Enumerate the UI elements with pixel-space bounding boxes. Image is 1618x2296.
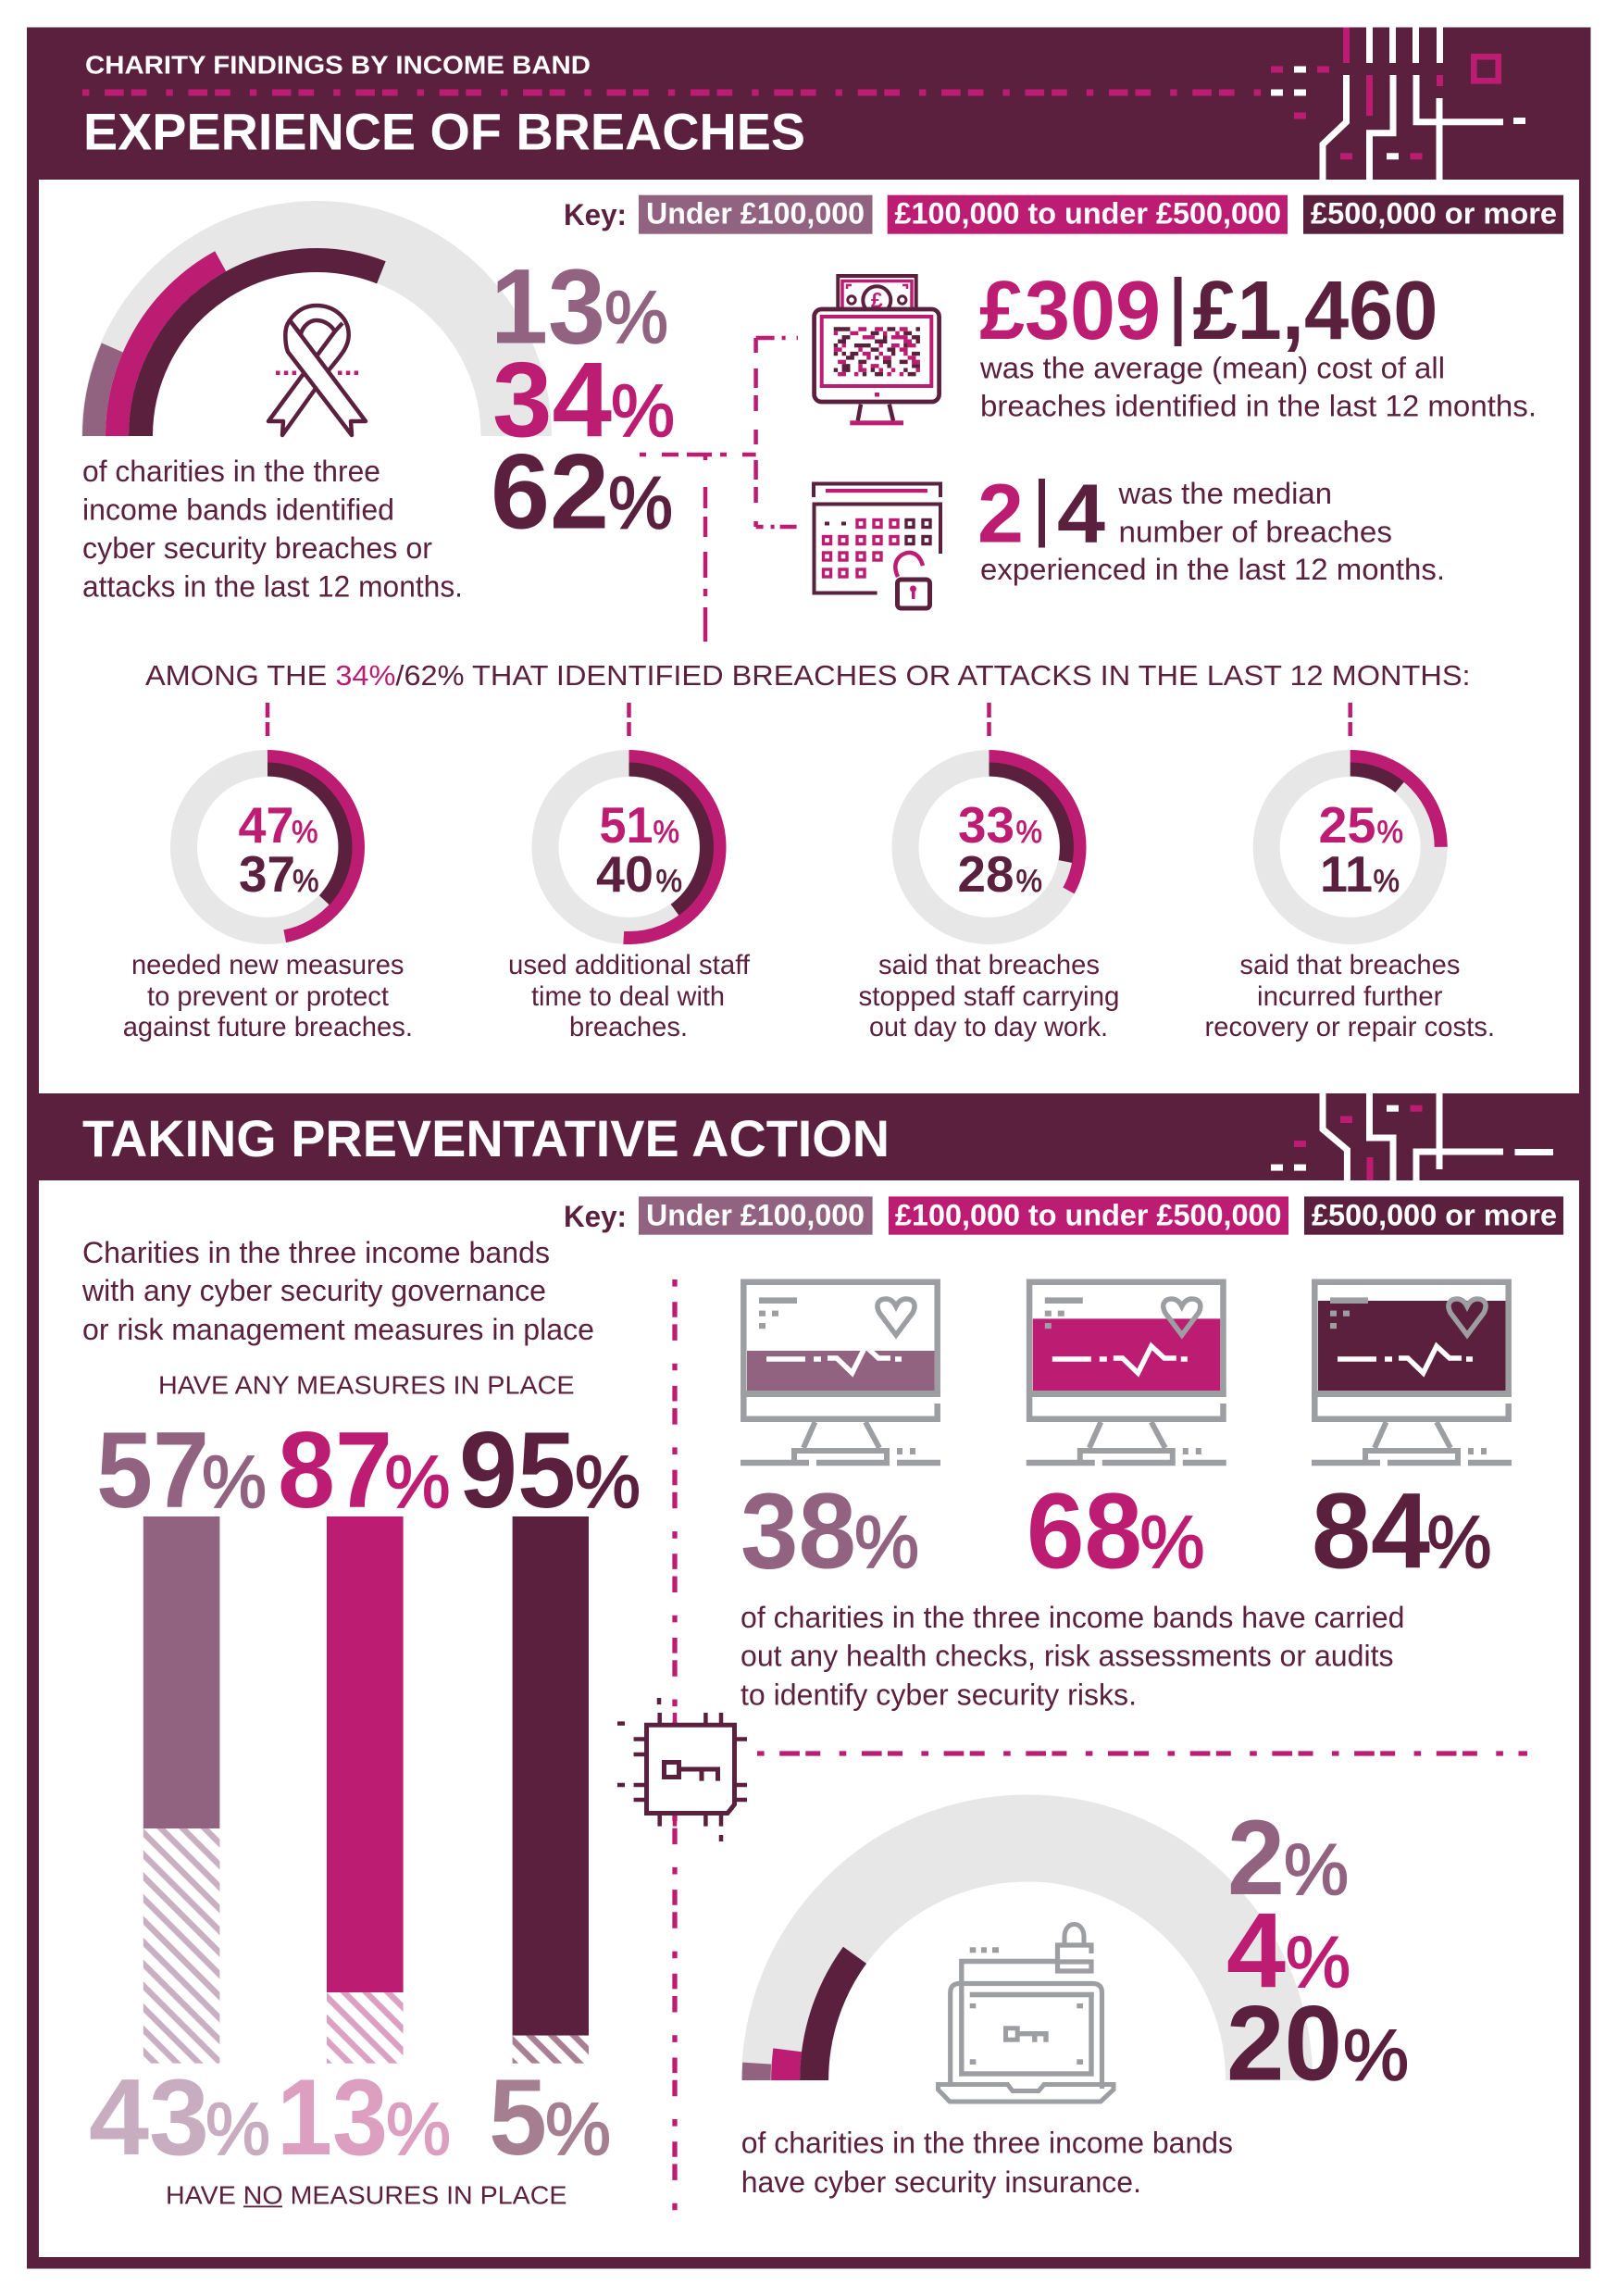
- stat: average cost: [979, 265, 1537, 422]
- stat: 68 percent: 68: [1027, 1470, 1142, 1591]
- icon: monitor 68 percent: [1027, 1282, 1226, 1463]
- bar: 100k to 500k: 13: [277, 2056, 388, 2177]
- caption: recovery or repair costs.: [1205, 1012, 1495, 1042]
- donut: additional staff time: [508, 756, 751, 1042]
- text: identified breaches: attacks in the last 12 months.: [82, 570, 463, 604]
- stat: 20 percent: 20: [1226, 1985, 1342, 2103]
- text: governance intro: with any cyber security governance: [81, 1274, 546, 1307]
- title: EXPERIENCE OF BREACHES: [83, 102, 805, 161]
- stat: 13 percent: 13: [491, 248, 605, 367]
- stat: 34 percent: 34: [492, 341, 612, 459]
- donut: repair costs: %: [1377, 815, 1403, 850]
- icon: ransom monitor: [815, 276, 940, 425]
- header: experience of breaches: [82, 50, 1263, 161]
- icon: laptop with padlock: [939, 1924, 1114, 2102]
- caption: [508, 950, 751, 1042]
- text: health checks: to identify cyber security risks.: [741, 1678, 1137, 1711]
- stat: 68 percent: %: [1140, 1501, 1205, 1583]
- donut: stopped staff working: %: [1016, 864, 1042, 899]
- stat: 68 percent: [1027, 1470, 1205, 1591]
- stat: 62 percent: [491, 433, 673, 552]
- bar: 500k or more: 5: [489, 2056, 547, 2177]
- donut: new measures: 47: [239, 796, 294, 854]
- stat: 20 percent: %: [1343, 2015, 1409, 2096]
- text: average cost: was the average (mean) cost of all: [979, 352, 1445, 385]
- text: cyber insurance: of charities in the three income bands: [741, 2127, 1233, 2160]
- donut: new measures: %: [292, 864, 318, 899]
- donut: additional staff time: %: [655, 864, 682, 899]
- text: cyber insurance: have cyber security insurance.: [741, 2165, 1141, 2199]
- stat: 20 percent: [1226, 1985, 1409, 2103]
- bar: 500k or more: %: [545, 2088, 611, 2170]
- bar: 100k to 500k: %: [385, 1441, 450, 1523]
- text: governance intro: [81, 1236, 594, 1346]
- key: income bands lower: Key:: [564, 1200, 627, 1233]
- text: identified breaches: [82, 455, 463, 604]
- semicircle chart: cyber insurance: [756, 1839, 1269, 2080]
- stat: 84 percent: [1312, 1470, 1492, 1591]
- donut: stopped staff working: [859, 756, 1120, 1042]
- label: have no measures: HAVE NO MEASURES IN PLACE: [166, 2181, 566, 2209]
- donut: stopped staff working: 28: [957, 845, 1014, 903]
- bar: under 100k: [89, 1409, 270, 2177]
- stat: 62 percent: 62: [491, 433, 609, 552]
- caption: against future breaches.: [123, 1012, 413, 1042]
- stat: 38 percent: %: [854, 1501, 919, 1583]
- panel: taking preventative action: [39, 1180, 1579, 2257]
- caption: [123, 950, 413, 1042]
- key: income bands top: [564, 195, 1563, 234]
- stat: median breaches: 4: [1057, 468, 1105, 561]
- donut: repair costs: 11: [1320, 845, 1373, 903]
- icon: monitor 84 percent: [1312, 1282, 1512, 1463]
- stat: 38 percent: 38: [741, 1470, 856, 1591]
- icon: chip with key: [617, 1698, 747, 1841]
- stat: median breaches: [977, 468, 1445, 586]
- text: governance intro: Charities in the three income bands: [82, 1236, 550, 1269]
- caption: said that breaches: [878, 950, 1100, 980]
- bar chart: measures in place: [89, 1409, 641, 2177]
- icon: ransom monitor: £: [871, 288, 883, 312]
- donut: new measures: [123, 756, 413, 1042]
- connector lines: [640, 338, 798, 642]
- stat: average cost: £309: [979, 265, 1161, 357]
- donut: additional staff time: 40: [596, 845, 653, 903]
- stat: median breaches: 2: [977, 468, 1024, 561]
- bar: 100k to 500k: [277, 1409, 451, 2177]
- donut: additional staff time: %: [653, 815, 679, 850]
- donut: repair costs: %: [1374, 864, 1400, 899]
- caption: to prevent or protect: [147, 981, 389, 1012]
- text: identified breaches: cyber security breaches or: [82, 531, 432, 565]
- text: identified breaches: of charities in the three: [82, 455, 380, 488]
- caption: [1205, 950, 1495, 1042]
- text: governance intro: or risk management measures in place: [82, 1313, 594, 1346]
- bar: under 100k: 43: [89, 2056, 209, 2177]
- stat: median breaches: experienced in the last 12 months.: [980, 553, 1445, 586]
- key: income bands top: £500,000 or more: [1311, 196, 1557, 230]
- stat: median breaches: number of breaches: [1118, 516, 1392, 549]
- bar: under 100k: 57: [96, 1409, 209, 1530]
- caption: [859, 950, 1120, 1042]
- caption: time to deal with: [531, 981, 725, 1012]
- icon: calendar and padlock: [814, 483, 940, 608]
- semicircle chart: identified breaches: [94, 236, 517, 436]
- bar: under 100k: %: [205, 2088, 270, 2170]
- stat: 4 percent: %: [1286, 1921, 1350, 2003]
- donut: stopped staff working: %: [1016, 815, 1042, 850]
- text: health checks: [741, 1601, 1405, 1711]
- bar: 500k or more: [459, 1409, 641, 2177]
- key: income bands lower: £500,000 or more: [1312, 1199, 1557, 1232]
- caption: stopped staff carrying: [859, 981, 1120, 1012]
- stat: 84 percent: %: [1427, 1501, 1492, 1583]
- donut: new measures: %: [292, 815, 318, 850]
- stat: average cost: breaches identified in the last 12 months.: [980, 389, 1537, 422]
- icon: circuit decoration top: [1271, 28, 1525, 180]
- text: median breaches: was the median: [1117, 477, 1332, 510]
- text: cyber insurance: [741, 2127, 1233, 2199]
- connector ticks: [268, 703, 1350, 736]
- icon: ribbon: [268, 306, 366, 435]
- key: income bands lower: Under £100,000: [646, 1199, 865, 1232]
- stat: 84 percent: 84: [1312, 1470, 1430, 1591]
- heading: taking preventative action: TAKING PREVENTATIVE ACTION: [82, 1109, 890, 1167]
- stat: 2 percent: [1227, 1799, 1349, 1917]
- stat: average cost: £1,460: [1192, 265, 1438, 357]
- caption: needed new measures: [131, 950, 404, 980]
- key: income bands top: Under £100,000: [646, 196, 865, 230]
- bar: under 100k: %: [202, 1441, 267, 1523]
- stat: 34 percent: [492, 341, 675, 459]
- bar: 100k to 500k: %: [386, 2088, 451, 2170]
- stat: 2 percent: 2: [1227, 1799, 1285, 1917]
- donut: repair costs: 25: [1318, 796, 1375, 854]
- donut: repair costs: [1205, 756, 1495, 1042]
- key: income bands top: Key:: [564, 198, 627, 231]
- caption: breaches.: [569, 1012, 688, 1042]
- text: identified breaches: income bands identified: [82, 493, 394, 526]
- stat: 62 percent: %: [608, 461, 673, 544]
- text: health checks: out any health checks, risk assessments or audits: [741, 1639, 1394, 1672]
- caption: out day to day work.: [869, 1012, 1108, 1042]
- key: income bands top: £100,000 to under £500,000: [894, 196, 1281, 230]
- stat: 34 percent: %: [611, 369, 675, 452]
- panel: experience of breaches: [39, 180, 1579, 1093]
- key: income bands lower: £100,000 to under £500,000: [895, 1199, 1281, 1232]
- caption: used additional staff: [508, 950, 751, 980]
- subheading: among those identifying breaches: AMONG THE 34%/62% THAT IDENTIFIED BREACHES OR ATTACKS IN THE LAST 12 MONTHS:: [145, 659, 1471, 692]
- bar: 500k or more: %: [575, 1441, 641, 1523]
- donut: new measures: 37: [239, 845, 295, 903]
- icon: circuit decoration middle: [1271, 1093, 1553, 1180]
- bar: 100k to 500k: 87: [278, 1409, 392, 1530]
- stat: 4 percent: [1226, 1891, 1350, 2010]
- key: income bands lower: [564, 1196, 1563, 1235]
- stat: 38 percent: [741, 1470, 919, 1591]
- stat: 13 percent: [491, 248, 668, 367]
- stat: 13 percent: %: [604, 276, 668, 358]
- caption: incurred further: [1257, 981, 1443, 1012]
- stat: 2 percent: %: [1284, 1828, 1349, 1910]
- text: health checks: of charities in the three income bands have carried: [741, 1601, 1405, 1634]
- divider lines: [675, 1279, 1527, 2213]
- donut: stopped staff working: 33: [958, 796, 1014, 854]
- icon: monitor 38 percent: [741, 1282, 940, 1463]
- label: have any measures: HAVE ANY MEASURES IN PLACE: [158, 1370, 575, 1400]
- bar: 500k or more: 95: [459, 1409, 576, 1530]
- caption: said that breaches: [1239, 950, 1460, 980]
- supertitle: CHARITY FINDINGS BY INCOME BAND: [85, 50, 591, 80]
- stat: 4 percent: 4: [1226, 1891, 1286, 2010]
- donut: additional staff time: 51: [600, 796, 653, 854]
